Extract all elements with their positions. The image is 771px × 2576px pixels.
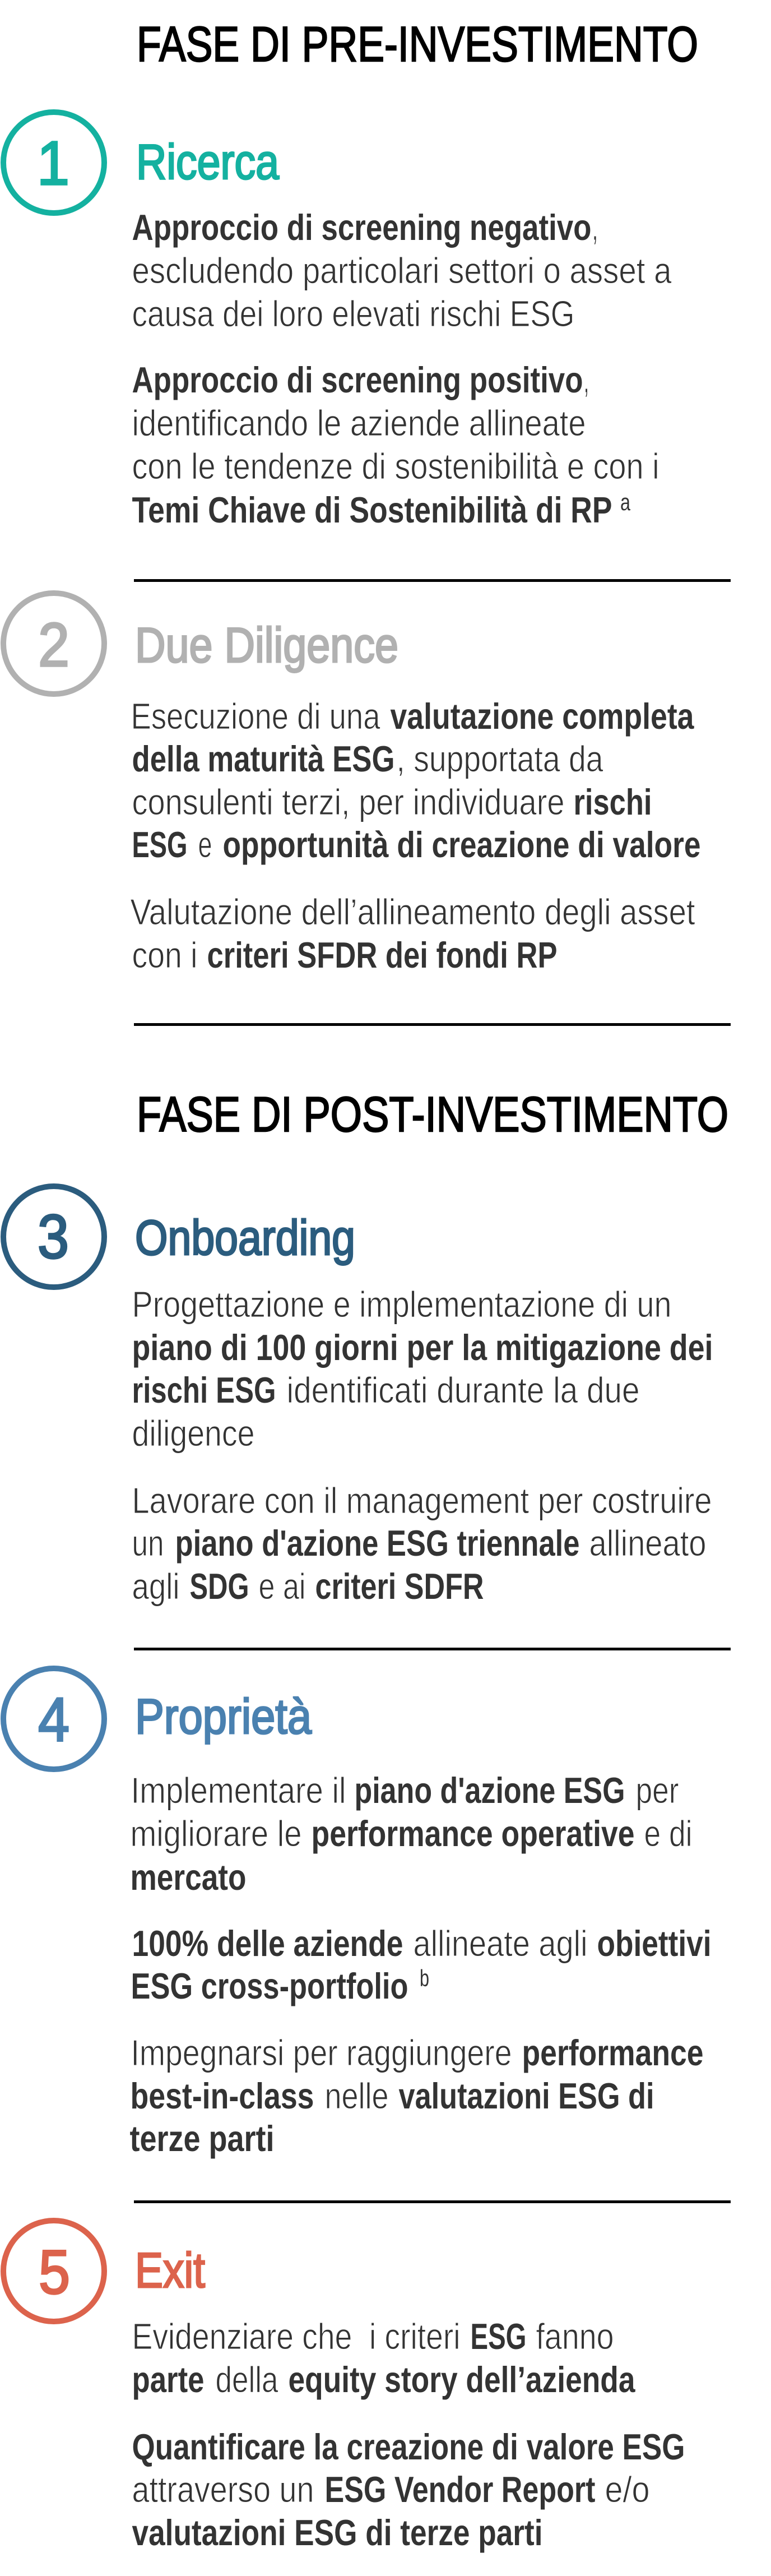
text block: SFDR alignment: Valutazione dell’allineamento degli asset: [130, 891, 695, 932]
text block: ESG maturity assessment: ESG: [132, 824, 187, 865]
text block: negative screening: [132, 207, 672, 334]
text block: cross-portfolio objectives: obiettivi: [597, 1923, 712, 1964]
text block: ESG maturity assessment: Esecuzione di una: [131, 696, 380, 737]
text block: ESG maturity assessment: valutazione completa: [390, 696, 694, 737]
text block: equity story: ESG: [471, 2316, 527, 2357]
text block: negative screening: causa dei loro elevati rischi ESG: [132, 293, 575, 334]
panel: step 3 Onboarding: [3, 1186, 713, 1607]
text block: implement action plan: Implementare il: [131, 1770, 346, 1811]
icon: number 2 circle: 2: [38, 611, 69, 679]
text block: negative screening: Approccio di screening negativo: [132, 207, 592, 248]
text block: equity story: parte: [132, 2359, 204, 2400]
panel: step 1 Ricerca: [3, 112, 672, 530]
text block: three-year ESG action plan: criteri SDFR: [315, 1566, 484, 1607]
text block: SFDR alignment: criteri SFDR dei fondi RP: [207, 935, 557, 975]
panel: step 4 Proprieta: [3, 1668, 712, 2159]
text block: three-year ESG action plan: un: [132, 1523, 164, 1564]
text block: best-in-class ratings: best-in-class: [130, 2075, 314, 2116]
text block: positive screening: con le tendenze di sostenibilità e con i: [132, 446, 659, 487]
panel: step 5 Exit: [3, 2221, 685, 2553]
text block: three-year ESG action plan: piano d'azione ESG triennale: [175, 1523, 579, 1564]
text block: implement action plan: e di: [644, 1813, 693, 1854]
text block: three-year ESG action plan: e ai: [259, 1566, 306, 1607]
text block: SFDR alignment: con i: [132, 935, 197, 975]
text block: implement action plan: performance operative: [312, 1813, 634, 1854]
panel: step 2 Due Diligence: [3, 593, 700, 975]
text block: ESG maturity assessment: rischi: [574, 781, 652, 822]
text block: ESG maturity assessment: consulenti terzi, per individuare: [132, 781, 565, 822]
icon: number 3 circle: [3, 1186, 104, 1287]
icon: number 5 circle: [3, 2221, 104, 2321]
heading: Exit: Exit: [135, 2242, 205, 2298]
text block: equity story: equity story dell’azienda: [288, 2359, 635, 2400]
text block: 100-day plan: Progettazione e implementazione di un: [132, 1284, 671, 1325]
text block: SFDR alignment: [130, 891, 695, 975]
text block: value creation: valutazioni ESG di terze parti: [132, 2512, 542, 2553]
icon: number 1 circle: [3, 112, 104, 213]
icon: number 4 circle: [3, 1668, 104, 1769]
text block: positive screening: ,: [584, 359, 589, 400]
heading: Ricerca: Ricerca: [136, 134, 279, 189]
text block: best-in-class ratings: valutazioni ESG di: [399, 2075, 654, 2116]
text block: implement action plan: mercato: [130, 1857, 247, 1898]
text block: positive screening: Temi Chiave di Sostenibilità di RP: [132, 489, 612, 530]
text block: cross-portfolio objectives: b: [420, 1965, 429, 1991]
icon: number 3 circle: 3: [38, 1203, 69, 1271]
text block: implement action plan: piano d'azione ESG: [354, 1770, 625, 1811]
text block: cross-portfolio objectives: [131, 1923, 712, 2006]
text block: 100-day plan: diligence: [132, 1413, 254, 1454]
icon: number 1 circle: 1: [37, 129, 69, 198]
heading: Onboarding: Onboarding: [135, 1210, 355, 1265]
text block: ESG maturity assessment: [131, 696, 700, 865]
text block: three-year ESG action plan: [132, 1480, 712, 1607]
text block: value creation: e/o: [605, 2469, 650, 2510]
text block: implement action plan: migliorare le: [130, 1813, 301, 1854]
text block: equity story: della: [215, 2359, 278, 2400]
text block: ESG maturity assessment: e: [198, 824, 212, 865]
text block: cross-portfolio objectives: allineate agli: [414, 1923, 587, 1964]
text block: value creation: attraverso un: [132, 2469, 314, 2510]
text block: value creation: [132, 2426, 685, 2553]
text block: 100-day plan: rischi ESG: [132, 1370, 276, 1410]
text block: cross-portfolio objectives: ESG cross-portfolio: [131, 1965, 408, 2006]
icon: number 2 circle: [3, 593, 104, 694]
text block: cross-portfolio objectives: 100% delle aziende: [132, 1923, 403, 1964]
text block: value creation: ESG Vendor Report: [325, 2469, 595, 2510]
text block: 100-day plan: [132, 1284, 713, 1454]
text block: best-in-class ratings: nelle: [325, 2075, 389, 2116]
text block: best-in-class ratings: Impegnarsi per raggiungere: [131, 2032, 512, 2073]
text block: negative screening: escludendo particolari settori o asset a: [132, 250, 672, 291]
text block: ESG maturity assessment: , supportata da: [397, 738, 603, 779]
text block: best-in-class ratings: [130, 2032, 704, 2159]
text block: 100-day plan: identificati durante la due: [287, 1370, 640, 1410]
icon: number 4 circle: 4: [38, 1685, 69, 1754]
text block: three-year ESG action plan: SDG: [189, 1566, 249, 1607]
text block: positive screening: a: [620, 489, 630, 515]
text block: three-year ESG action plan: agli: [132, 1566, 179, 1607]
heading: Due Diligence: Due Diligence: [135, 617, 398, 673]
text block: equity story: [132, 2316, 635, 2400]
text block: best-in-class ratings: performance: [522, 2032, 704, 2073]
text block: best-in-class ratings: terze parti: [130, 2118, 275, 2159]
text block: implement action plan: [130, 1770, 693, 1898]
heading: Proprietà: Proprietà: [135, 1689, 312, 1744]
text block: negative screening: ,: [592, 207, 598, 248]
text block: ESG maturity assessment: della maturità ESG: [132, 738, 394, 779]
text block: equity story: fanno: [536, 2316, 614, 2357]
text block: positive screening: [132, 359, 659, 530]
text block: positive screening: identificando le aziende allineate: [132, 403, 586, 443]
text block: three-year ESG action plan: allineato: [589, 1523, 706, 1564]
text block: implement action plan: per: [635, 1770, 679, 1811]
text block: positive screening: Approccio di screening positivo: [132, 359, 583, 400]
text block: equity story: Evidenziare che i criteri: [132, 2316, 461, 2357]
icon: number 5 circle: 5: [39, 2238, 70, 2307]
